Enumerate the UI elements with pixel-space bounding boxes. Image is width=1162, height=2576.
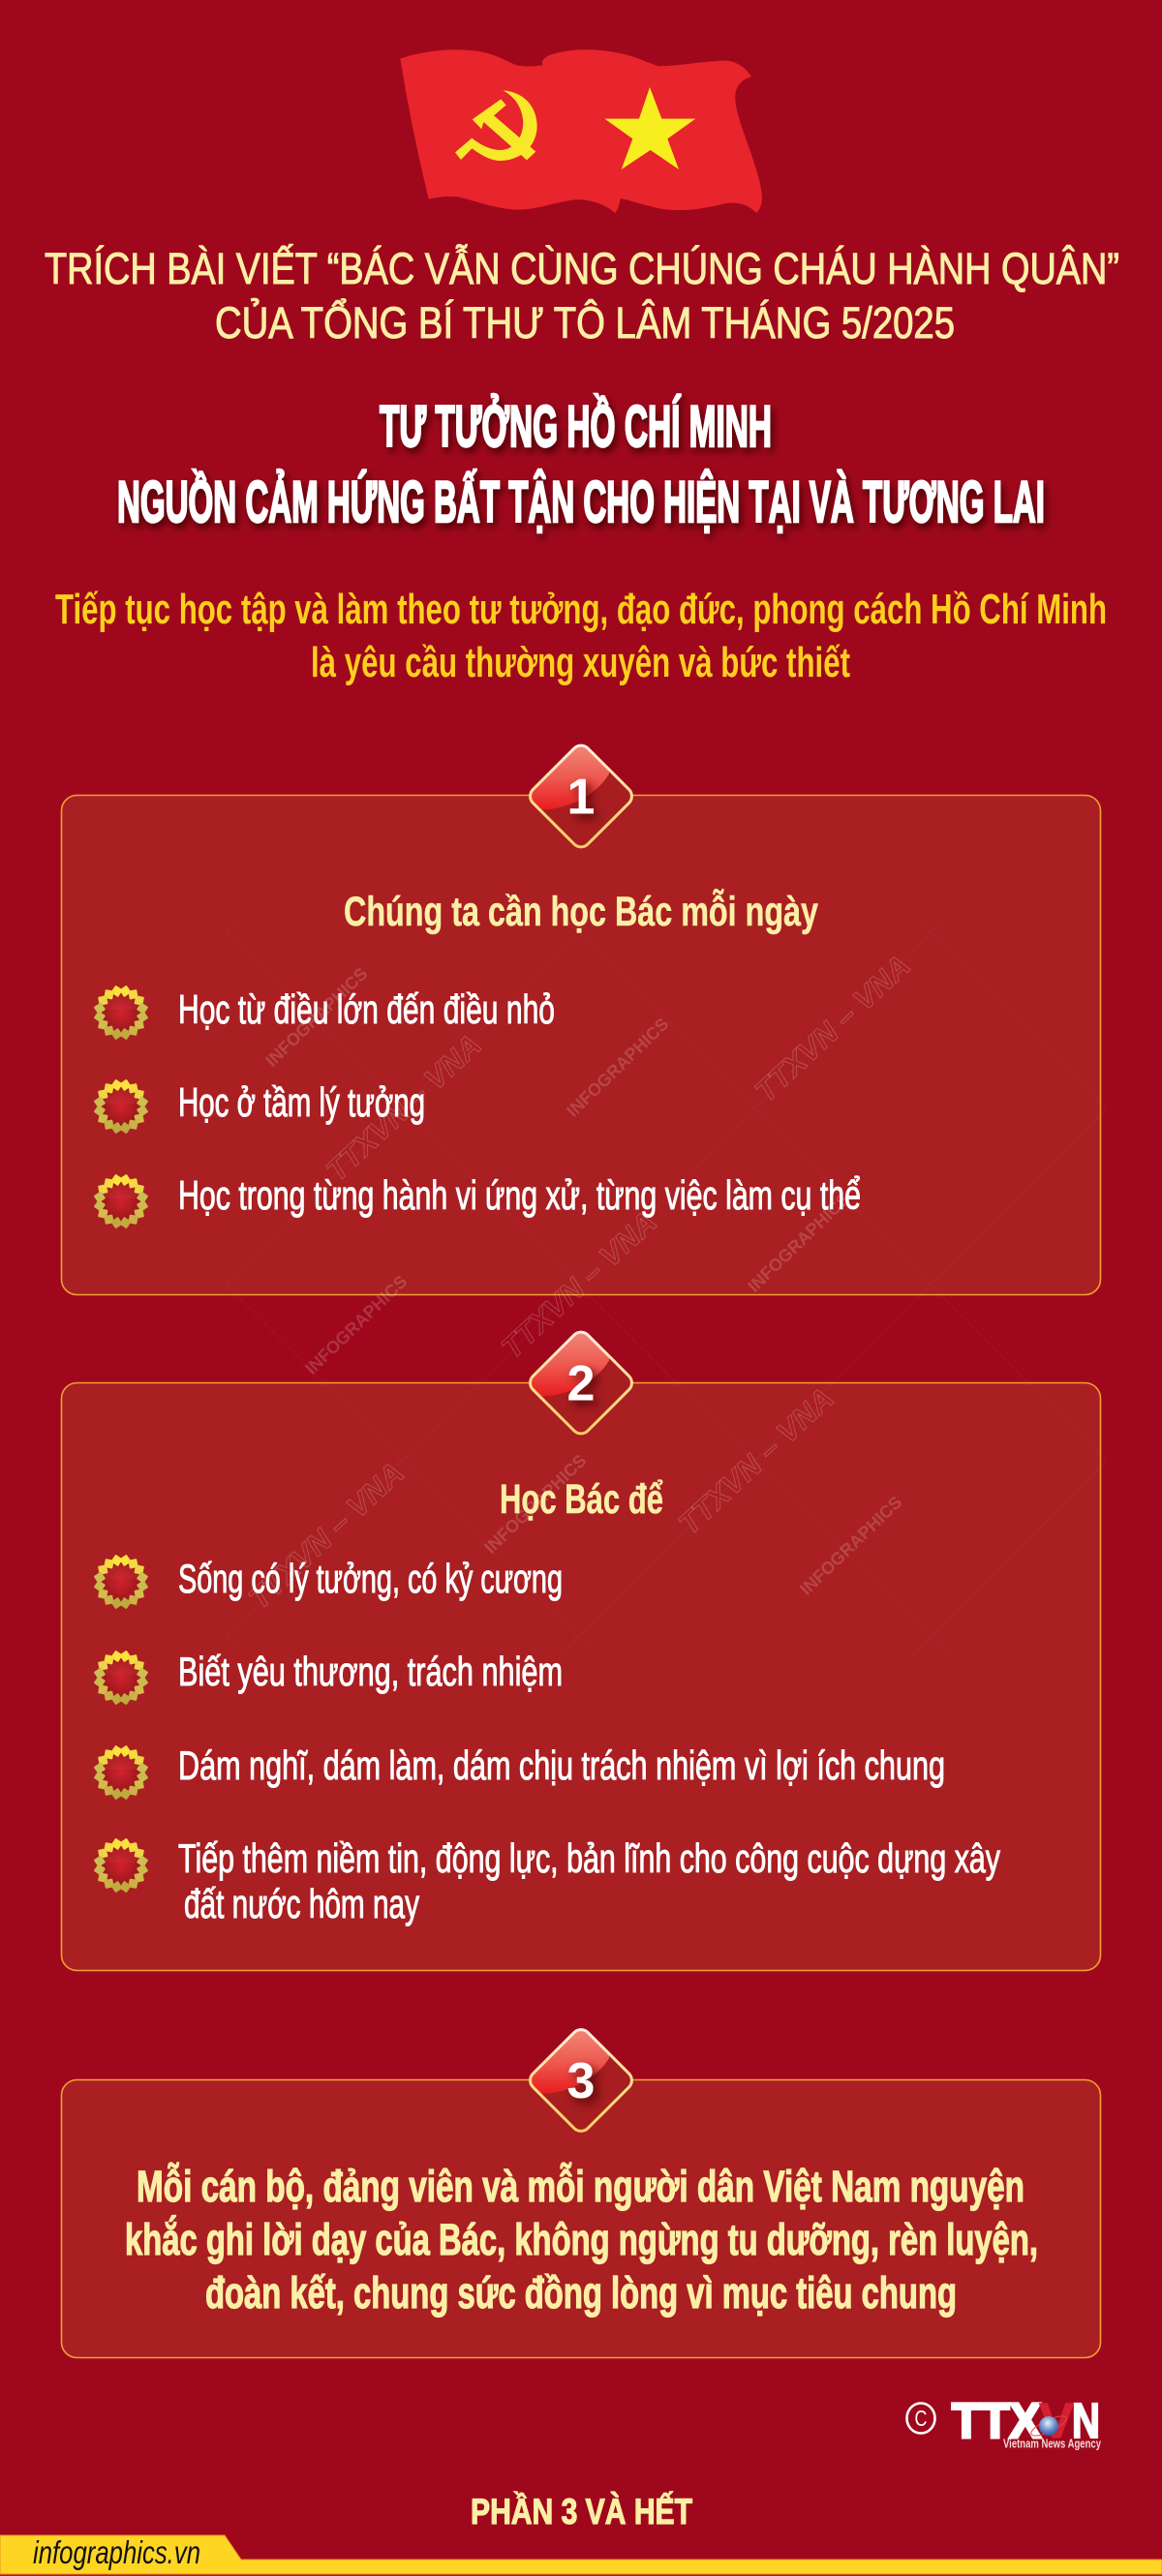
watermarks: INFOGRAPHICS xyxy=(744,1190,853,1296)
watermarks: TTXVN – VNA xyxy=(242,1456,411,1616)
logo: TTXVN: Vietnam News Agency xyxy=(1003,2436,1102,2451)
list: learn every day: Học trong từng hành vi ứng xử, từng việc làm cụ thể xyxy=(178,1172,861,1218)
badge: number 1 xyxy=(529,743,633,848)
panel: closing pledge xyxy=(62,2079,1100,2358)
list: learn every day: Học ở tầm lý tưởng xyxy=(178,1079,425,1125)
watermarks: INFOGRAPHICS xyxy=(480,1451,590,1558)
panel: reasons for learning xyxy=(62,1382,1100,1971)
list: reasons for learning: đất nước hôm nay xyxy=(184,1881,419,1926)
logo: TTXVN: N xyxy=(1072,2393,1100,2448)
badge: number 1: 1 xyxy=(567,769,595,825)
watermarks: INFOGRAPHICS xyxy=(301,1272,411,1379)
watermarks: INFOGRAPHICS xyxy=(563,1015,672,1121)
list: reasons for learning: Biết yêu thương, trách nhiệm xyxy=(178,1649,563,1694)
panel 1 heading: Chúng ta cần học Bác mỗi ngày xyxy=(344,888,818,935)
watermarks: TTXVN – VNA xyxy=(495,1205,663,1365)
watermarks: TTXVN – VNA xyxy=(672,1381,841,1541)
logo: TTXVN: V xyxy=(1039,2393,1074,2448)
heading: article source: CỦA TỔNG BÍ THƯ TÔ LÂM THÁNG 5/2025 xyxy=(215,298,955,348)
title: TƯ TƯỞNG HỒ CHÍ MINH xyxy=(380,394,772,459)
badge: number 3 xyxy=(529,2028,633,2133)
panel 2 heading: Học Bác để xyxy=(500,1476,663,1523)
logo: TTXVN: TTX xyxy=(952,2393,1041,2448)
panel: learn every day xyxy=(62,796,1100,1295)
badge: number 3: 3 xyxy=(567,2053,595,2109)
watermarks: TTXVN – VNA xyxy=(320,1028,488,1188)
title xyxy=(117,394,1045,534)
watermarks: TTXVN – VNA xyxy=(749,949,917,1108)
logo: TTXVN xyxy=(906,2393,1102,2451)
subtitle xyxy=(55,586,1107,686)
part label: PHẦN 3 VÀ HẾT xyxy=(471,2492,692,2531)
footer bar xyxy=(0,2534,1162,2576)
list: reasons for learning xyxy=(94,1555,1000,1926)
logo: TTXVN: C xyxy=(914,2406,928,2431)
list: learn every day: Học từ điều lớn đến điều nhỏ xyxy=(178,986,555,1032)
list: learn every day xyxy=(94,985,861,1228)
badge: number 2 xyxy=(529,1330,633,1435)
watermarks: INFOGRAPHICS xyxy=(261,964,371,1071)
subtitle: là yêu cầu thường xuyên và bức thiết xyxy=(311,639,850,686)
panel 3 text xyxy=(125,2162,1038,2318)
footer bar: infographics.vn xyxy=(33,2534,200,2570)
list: reasons for learning: Sống có lý tưởng, có kỷ cương xyxy=(178,1556,563,1601)
badge: number 2: 2 xyxy=(567,1355,595,1411)
icon: party and national flag xyxy=(400,49,762,213)
watermarks xyxy=(242,949,917,1616)
heading: article source xyxy=(45,244,1119,348)
watermarks: INFOGRAPHICS xyxy=(796,1493,905,1599)
